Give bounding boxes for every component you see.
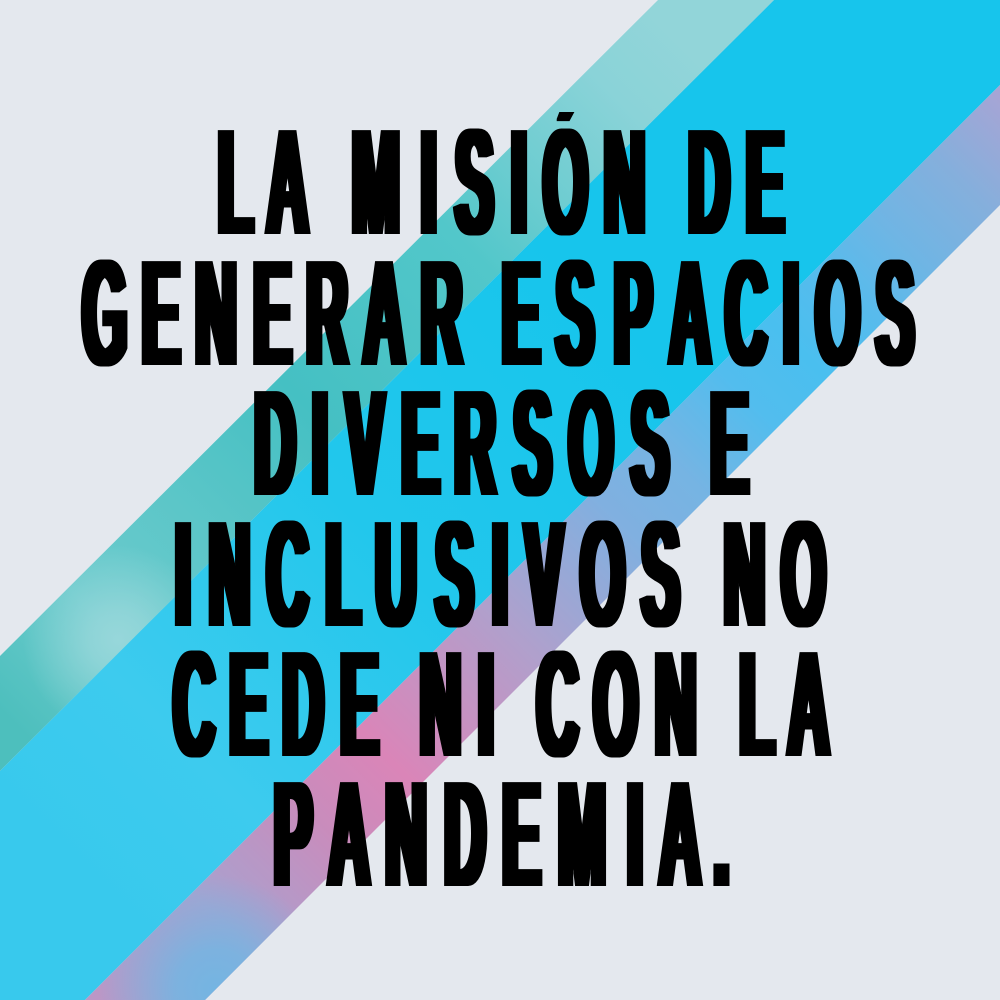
title text: GENERAR ESPACIOS bbox=[82, 230, 914, 398]
title text: PANDEMIA. bbox=[274, 751, 729, 919]
title text: DIVERSOS E bbox=[254, 360, 749, 528]
title text: CEDE NI CON LA bbox=[173, 621, 829, 789]
stripe blue glow bbox=[85, 735, 470, 1000]
teal stripe glow bbox=[0, 436, 336, 771]
title text bbox=[82, 98, 914, 919]
title text: LA MISIÓN DE bbox=[218, 98, 784, 267]
teal stripe bbox=[0, 0, 774, 771]
title text: INCLUSIVOS NO bbox=[175, 491, 826, 659]
